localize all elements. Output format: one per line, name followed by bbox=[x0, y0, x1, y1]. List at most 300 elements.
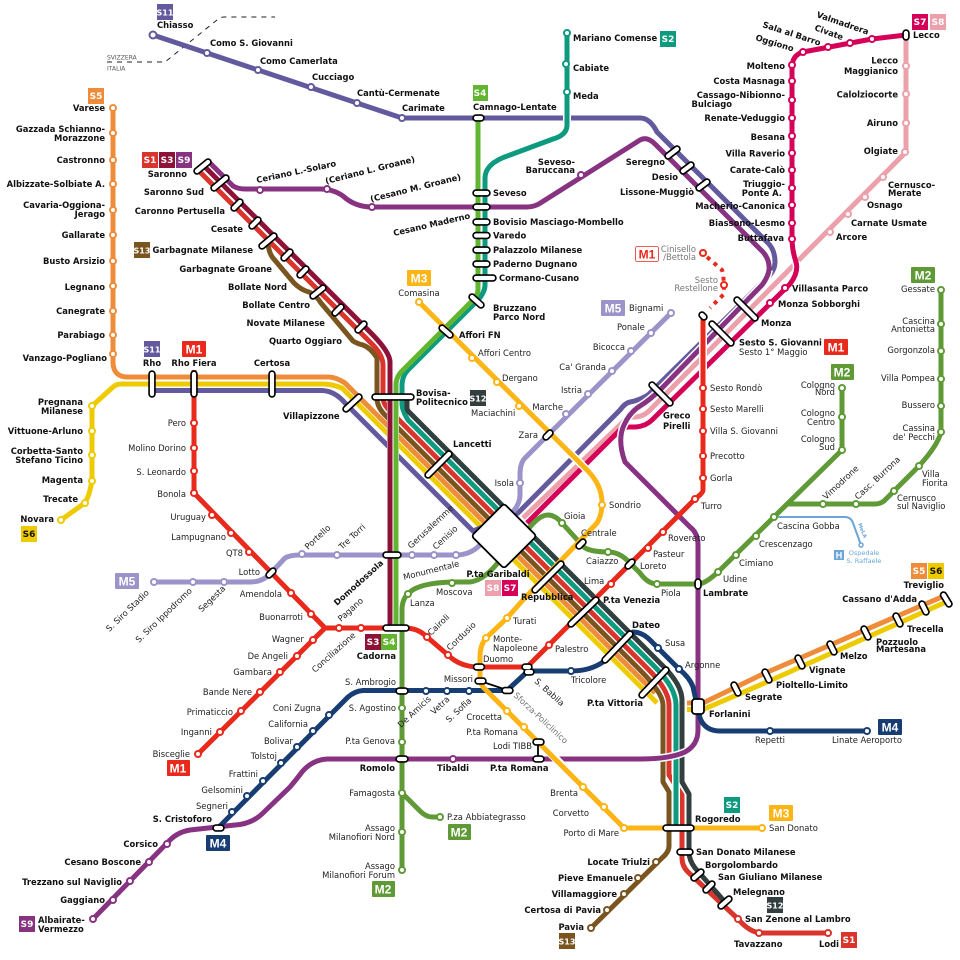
S8 south labels bbox=[663, 180, 936, 431]
badge M1 Rho Fiera bbox=[182, 341, 206, 357]
M4 labels: De Amicis bbox=[396, 694, 433, 729]
S11 labels bbox=[157, 20, 445, 113]
badge S3 Cadorna: S3 bbox=[367, 638, 379, 648]
hospital labels: Ospedale bbox=[849, 549, 879, 557]
S9 west labels: Vermezzo bbox=[38, 924, 84, 934]
badge S6 Novara bbox=[21, 526, 37, 542]
M4 labels: Repetti bbox=[755, 735, 785, 745]
badge S13 Garbagnate: S13 bbox=[134, 246, 150, 256]
passante labels: Tibaldi bbox=[437, 763, 469, 773]
M5 labels: Portello bbox=[303, 523, 332, 551]
passante labels: P.ta Romana bbox=[490, 763, 549, 773]
M5 labels: Marche bbox=[532, 402, 563, 412]
S7 labels: Bulciago bbox=[692, 99, 732, 109]
badge M5 Bignami bbox=[601, 300, 625, 316]
S8 labels: Olgiate bbox=[864, 146, 898, 156]
east branch labels: Melzo bbox=[840, 651, 868, 661]
route S12 dark bbox=[407, 398, 725, 902]
passante labels: P.ta Venezia bbox=[603, 595, 660, 605]
S7 labels: Renate-Veduggio bbox=[704, 113, 785, 123]
M2 southeast labels bbox=[661, 454, 948, 598]
M1 west labels: Bisceglie bbox=[153, 749, 190, 759]
M1 west labels: Pero bbox=[168, 418, 186, 428]
hospital labels bbox=[847, 523, 881, 565]
M1 east labels: Rovereto bbox=[668, 533, 706, 543]
hospital labels: S. Raffaele bbox=[847, 557, 881, 565]
M2 southeast labels: Casc. Burrona bbox=[853, 454, 902, 501]
passante labels: Dateo bbox=[632, 620, 660, 630]
M4 labels: Vetra bbox=[429, 694, 452, 716]
badge S13 Pavia: S13 bbox=[559, 938, 575, 946]
badge M4 Linate: M4 bbox=[882, 720, 899, 734]
west trunk labels: Politecnico bbox=[416, 397, 468, 407]
badge M2 Abbiategrasso bbox=[448, 824, 471, 840]
route S3 S4 casing bbox=[390, 400, 396, 628]
east branch labels: Pioltello-Limito bbox=[776, 680, 848, 690]
S5 labels: Parabiago bbox=[57, 330, 105, 340]
M4 west labels: Tolstoj bbox=[250, 751, 277, 761]
M1 central rotated labels bbox=[310, 596, 513, 674]
badge S5 Varese bbox=[88, 88, 104, 104]
S6 labels: Vittuone-Arluno bbox=[8, 426, 83, 436]
M2 east labels bbox=[801, 284, 935, 452]
Swiss-Italian border: SVIZZERA bbox=[107, 54, 138, 62]
icon hospital H: H bbox=[836, 550, 842, 560]
rotated S9 labels: (Ceriano L. Groane) bbox=[324, 154, 416, 186]
badge M5 San Siro bbox=[115, 573, 139, 589]
badge S9 Albairate bbox=[19, 916, 35, 932]
S7 labels: Ponte A. bbox=[742, 188, 782, 198]
Swiss-Italian border: ITALIA bbox=[107, 66, 126, 72]
M1 east labels: Loreto bbox=[640, 561, 666, 571]
route S9 casing bbox=[621, 270, 769, 759]
S9 east labels bbox=[526, 157, 694, 197]
badge S3 Saronno bbox=[159, 152, 175, 168]
route M4 navy bbox=[218, 632, 867, 828]
M2 east labels: Cascina bbox=[902, 316, 935, 326]
M1 extension labels: /Bettola bbox=[663, 252, 696, 262]
S6 labels: Trecate bbox=[43, 494, 78, 504]
M5 labels: Gerusalemme bbox=[406, 503, 455, 550]
S9 west labels: Trezzano sul Naviglio bbox=[22, 877, 122, 887]
east branch labels: Treviglio bbox=[904, 580, 944, 590]
M2 southeast labels: Piola bbox=[661, 588, 681, 598]
M2 southeast labels: Cernusco bbox=[897, 493, 936, 503]
badge S9 Albairate: S9 bbox=[21, 920, 33, 930]
M1 central rotated labels: Conciliazione bbox=[310, 630, 357, 674]
route S7 magenta bbox=[527, 35, 906, 523]
S11 labels: Cantù-Cermenate bbox=[357, 88, 440, 98]
S7 labels: Costa Masnaga bbox=[713, 76, 785, 86]
badge S12 Melegnano: S12 bbox=[767, 902, 783, 910]
M2 south labels bbox=[322, 677, 396, 880]
S9 west labels: Gaggiano bbox=[60, 895, 105, 905]
badge M4 San Cristoforo bbox=[206, 835, 230, 851]
badge S4 Camnago bbox=[473, 85, 488, 101]
badge S3 Cadorna bbox=[365, 634, 381, 650]
badge M3 Comasina: M3 bbox=[411, 272, 428, 286]
badge S6 Treviglio bbox=[928, 563, 944, 579]
M2 east labels: Cologno bbox=[801, 380, 835, 390]
badge S2 Rogoredo bbox=[724, 797, 740, 813]
M3 labels: Dergano bbox=[502, 373, 538, 383]
S6 labels bbox=[8, 397, 83, 524]
M3 labels: Maciachini bbox=[471, 408, 515, 418]
badge M2 Cologno: M2 bbox=[834, 366, 851, 380]
M1 extension labels: Cinisello bbox=[661, 244, 696, 254]
M4 labels bbox=[396, 638, 902, 745]
badge S7 Lecco bbox=[912, 14, 928, 30]
Sforza-Policlinico grey label: Sforza-Policlinico bbox=[512, 690, 570, 746]
S7 labels: Biassono-Lesmo bbox=[709, 218, 785, 228]
S9 west labels: Albairate- bbox=[38, 915, 85, 925]
east branch labels: Pozzuolo bbox=[876, 637, 918, 647]
M2 south labels: S. Ambrogio bbox=[345, 677, 396, 687]
M2 southeast labels: Cimiano bbox=[739, 558, 773, 568]
S4 labels: Camnago-Lentate bbox=[473, 102, 557, 112]
stations S1 bbox=[735, 916, 831, 936]
S11 labels: Como S. Giovanni bbox=[210, 38, 293, 48]
passante labels: Domodossola bbox=[332, 558, 385, 607]
M2 east labels: Centro bbox=[807, 417, 835, 427]
M1 east labels: Sesto 1° Maggio bbox=[739, 347, 808, 357]
S5 labels: Gazzada Schianno- bbox=[16, 124, 106, 134]
S8 south labels: Sesto S. Giovanni bbox=[739, 338, 822, 348]
M2 southeast labels: Crescenzago bbox=[759, 539, 813, 549]
stations M3 bbox=[416, 299, 765, 831]
M1 east labels: Precotto bbox=[710, 451, 745, 461]
M4 labels: Tricolore bbox=[570, 675, 606, 685]
M3 labels: Brenta bbox=[550, 788, 578, 798]
Swiss-Italian border bbox=[107, 17, 275, 72]
S5 labels bbox=[7, 103, 107, 363]
badge S8 Lecco bbox=[930, 14, 946, 30]
S1 S3 S9 north labels bbox=[135, 169, 342, 346]
route S13 brown bbox=[268, 240, 669, 928]
badge S6 Treviglio: S6 bbox=[930, 567, 942, 577]
M1 east labels: Turro bbox=[700, 501, 722, 511]
M4 west labels: Bolivar bbox=[264, 736, 294, 746]
east branch labels: Segrate bbox=[745, 692, 782, 702]
route S2 north casing bbox=[563, 105, 571, 125]
M2 central labels: Caiazzo bbox=[586, 556, 618, 566]
route S2 teal bbox=[402, 178, 676, 828]
M4 labels: S. Sofia bbox=[444, 696, 473, 724]
S13 labels: Certosa di Pavia bbox=[524, 905, 601, 915]
stations M4 bbox=[229, 645, 870, 815]
S13 labels: Locate Triulzi bbox=[587, 857, 650, 867]
S13 labels: Pieve Emanuele bbox=[558, 873, 633, 883]
M5 labels: Ponale bbox=[617, 322, 645, 332]
badge M1 Cinisello outline bbox=[636, 246, 658, 262]
west trunk labels: Rho bbox=[143, 358, 161, 368]
route S3 over bundle bbox=[388, 395, 392, 628]
badge M2 Gessate bbox=[911, 267, 935, 283]
S5 labels: Gallarate bbox=[62, 230, 105, 240]
S7 labels: Villa Raverio bbox=[725, 148, 785, 158]
station MeLA bbox=[859, 543, 863, 547]
M2 east labels: Nord bbox=[815, 387, 835, 397]
route M5 lilac bbox=[154, 313, 671, 582]
passante labels: Lambrate bbox=[703, 588, 748, 598]
M1 west labels: De Angeli bbox=[248, 651, 288, 661]
badge S2 Mariano bbox=[660, 31, 676, 47]
S7 rotated labels: Sala al Barro bbox=[761, 19, 822, 48]
south labels: Lodi bbox=[819, 939, 839, 949]
badge S5 Treviglio bbox=[911, 563, 927, 579]
S1 S3 S9 north labels: Saronno Sud bbox=[144, 187, 204, 197]
S7 labels: Besana bbox=[751, 132, 785, 142]
S8 south labels: Greco bbox=[663, 410, 691, 420]
M3 labels: Comasina bbox=[398, 288, 440, 298]
M5 labels: Segesta bbox=[196, 583, 227, 614]
rotated S9 labels bbox=[255, 154, 471, 238]
route MeLA bbox=[777, 517, 861, 545]
M3 labels: Sondrio bbox=[609, 500, 641, 510]
S1 S3 S9 north labels: Garbagnate Groane bbox=[179, 264, 272, 274]
east branch labels: Martesana bbox=[876, 644, 926, 654]
badge S11 Rho bbox=[144, 341, 161, 357]
metro station labels bbox=[104, 244, 948, 880]
S13 labels: Villamaggiore bbox=[552, 889, 617, 899]
badge S2 Rogoredo: S2 bbox=[726, 801, 738, 811]
east branch labels: Trecella bbox=[907, 624, 944, 634]
S8 south labels: Cernusco- bbox=[888, 180, 936, 190]
south labels: San Giuliano Milanese bbox=[718, 872, 823, 882]
S7 labels bbox=[692, 61, 786, 243]
M3 labels: Lodi TIBB bbox=[493, 741, 532, 751]
S8 south labels: Pirelli bbox=[663, 421, 691, 431]
S8 south labels: Merate bbox=[888, 188, 922, 198]
badge M2 Abbiategrasso: M2 bbox=[451, 826, 468, 840]
route S8 pink bbox=[523, 35, 906, 518]
M1 west labels: Bonola bbox=[157, 489, 186, 499]
S7 labels: Carate-Calò bbox=[730, 165, 785, 175]
S9 west labels: Cesano Boscone bbox=[64, 857, 141, 867]
badge S11 Chiasso: S11 bbox=[157, 8, 174, 18]
M5 labels: Monumentale bbox=[402, 558, 460, 582]
badge M1 Rho Fiera: M1 bbox=[186, 342, 203, 356]
M4 west labels: Frattini bbox=[229, 769, 258, 779]
M2 southeast labels: Vimodrone bbox=[821, 463, 861, 501]
badge S13 Pavia bbox=[559, 933, 575, 949]
stations S7 bbox=[767, 36, 875, 306]
M1 central rotated labels: Cordusio bbox=[444, 620, 478, 652]
metro badges bbox=[115, 246, 935, 897]
M1 extension labels: Sesto bbox=[695, 275, 718, 285]
S8 south labels: Monza Sobborghi bbox=[778, 299, 860, 309]
S6 labels: Novara bbox=[20, 514, 54, 524]
badge S1 Saronno: S1 bbox=[144, 156, 156, 166]
rotated S9 labels: Cesano Maderno bbox=[392, 210, 471, 238]
S7 labels: Cassago-Nibionno- bbox=[697, 90, 786, 100]
route S4 green bbox=[396, 118, 478, 628]
S5 labels: Busto Arsizio bbox=[43, 256, 105, 266]
M1 extension labels bbox=[661, 244, 718, 293]
M1 east labels: Lima bbox=[584, 576, 604, 586]
M5 labels: S. Siro Ippodromo bbox=[133, 586, 194, 645]
east branch labels: Cassano d'Adda bbox=[842, 594, 917, 604]
M2 east labels: Sud bbox=[819, 442, 835, 452]
badge S1 Lodi: S1 bbox=[843, 936, 855, 946]
S2 north labels: Meda bbox=[573, 91, 599, 101]
S5 labels: Castronno bbox=[57, 155, 105, 165]
S1 S3 S9 north labels: Novate Milanese bbox=[246, 318, 325, 328]
badge S3 Saronno: S3 bbox=[161, 156, 173, 166]
M1 central rotated labels: Cairoli bbox=[425, 612, 451, 637]
east branch labels bbox=[745, 580, 944, 702]
M3 labels: P.ta Romana bbox=[466, 727, 518, 737]
badge S13 Garbagnate bbox=[134, 242, 150, 258]
S1 S3 S9 north labels: Garbagnate Milanese bbox=[152, 245, 253, 255]
badge M5 Bignami: M5 bbox=[605, 302, 622, 316]
S7 labels: Triuggio- bbox=[743, 179, 786, 189]
S11 labels: Cucciago bbox=[312, 72, 355, 82]
S9 west labels: Corsico bbox=[123, 839, 158, 849]
rotated S9 labels: (Cesano M. Groane) bbox=[369, 172, 462, 204]
west trunk labels bbox=[143, 358, 492, 449]
S2 north labels: Cabiate bbox=[573, 63, 609, 73]
M4 west labels bbox=[196, 703, 321, 811]
route S5 S6 east branch bbox=[687, 596, 946, 710]
M5 labels: Istria bbox=[561, 385, 582, 395]
M2 east labels: de' Pecchi bbox=[893, 432, 935, 442]
passante labels: Forlanini bbox=[709, 709, 751, 719]
S1 S3 S9 north labels: Saronno bbox=[148, 169, 187, 179]
M2 south labels: S. Agostino bbox=[349, 703, 396, 713]
M2 southeast labels: Cascina Gobba bbox=[777, 521, 840, 531]
interchange bars bbox=[152, 33, 949, 906]
M2 south labels: Famagosta bbox=[349, 788, 395, 798]
S5 labels: Canegrate bbox=[56, 306, 105, 316]
M2 central labels: Centrale bbox=[581, 528, 617, 538]
M4 west labels: Coni Zugna bbox=[273, 703, 321, 713]
M2 southeast labels: Villa bbox=[922, 469, 940, 479]
M2 central labels bbox=[410, 511, 618, 608]
M1 east labels: Gorla bbox=[710, 473, 733, 483]
route M1 casing bbox=[479, 320, 703, 667]
south labels: San Donato Milanese bbox=[696, 847, 796, 857]
west trunk labels: Lancetti bbox=[453, 439, 492, 449]
badge S1 Lodi bbox=[841, 932, 857, 948]
badge M1 Cinisello outline: M1 bbox=[639, 248, 656, 262]
M1 west labels: Gambara bbox=[233, 667, 272, 677]
passante labels: Cadorna bbox=[357, 651, 396, 661]
M3 labels: Napoleone bbox=[493, 643, 538, 653]
route S6 yellow bbox=[61, 384, 657, 703]
M1 east labels: Pasteur bbox=[653, 549, 685, 559]
M2 south labels: Assago bbox=[365, 823, 395, 833]
S1 S3 S9 north labels: Bollate Nord bbox=[228, 282, 287, 292]
stations M5 bbox=[151, 310, 674, 585]
M3 labels: Monte- bbox=[493, 634, 522, 644]
S4 labels: Palazzolo Milanese bbox=[493, 245, 582, 255]
S8 south labels: Osnago bbox=[867, 200, 903, 210]
M1 west labels: S. Leonardo bbox=[136, 467, 186, 477]
east branch labels: Vignate bbox=[809, 665, 846, 675]
M2 south labels: Milanofiori Nord bbox=[329, 832, 395, 842]
S6 labels: Magenta bbox=[42, 475, 83, 485]
badge S4 Cadorna: S4 bbox=[383, 638, 395, 648]
M5 labels: Tre Torri bbox=[336, 522, 367, 552]
S6 labels: Milanese bbox=[41, 406, 83, 416]
M2 central labels: Gioia bbox=[564, 511, 585, 521]
S6 labels: Corbetta-Santo bbox=[11, 446, 83, 456]
M1 east labels: Palestro bbox=[555, 644, 588, 654]
south labels: San Zenone al Lambro bbox=[745, 914, 851, 924]
M1 west labels: Uruguay bbox=[170, 512, 206, 522]
badge S5 Varese: S5 bbox=[90, 92, 102, 102]
M2 east labels: Cologno bbox=[801, 408, 835, 418]
S4 labels: Cormano-Cusano bbox=[499, 273, 579, 283]
badge M4 Linate bbox=[878, 719, 902, 735]
passante labels: P.ta Garibaldi bbox=[466, 569, 530, 579]
badge S9 Saronno: S9 bbox=[178, 156, 190, 166]
M1 east labels: Sesto Marelli bbox=[710, 404, 764, 414]
passante labels: P.ta Vittoria bbox=[587, 698, 643, 708]
M4 west labels: Gelsomini bbox=[201, 785, 243, 795]
M3 labels bbox=[398, 288, 818, 838]
S8 labels: Airuno bbox=[867, 118, 898, 128]
M1 east labels: Sesto Rondò bbox=[710, 383, 762, 393]
S9 west labels bbox=[22, 814, 212, 934]
M2 central labels: Moscova bbox=[436, 587, 473, 597]
route M3 yellow bbox=[419, 302, 762, 828]
route M2 green bbox=[402, 290, 941, 870]
stations S8 bbox=[827, 63, 909, 235]
badge S12 Melegnano bbox=[767, 897, 783, 913]
S6 labels: Pregnana bbox=[38, 397, 83, 407]
M2 southeast labels: sul Naviglio bbox=[897, 501, 945, 511]
badge M4 San Cristoforo: M4 bbox=[210, 836, 227, 850]
S8 labels: Calolziocorte bbox=[837, 90, 898, 100]
S8 labels bbox=[837, 56, 898, 156]
south labels: Borgolombardo bbox=[705, 860, 778, 870]
M5 labels: Cenisio bbox=[431, 523, 460, 551]
badge S7 Garibaldi bbox=[502, 580, 518, 596]
S8 south labels: Carnate Usmate bbox=[851, 218, 927, 228]
M1 west labels bbox=[128, 418, 305, 759]
badge M3 San Donato: M3 bbox=[773, 806, 790, 820]
S4 labels: Bovisio Masciago-Mombello bbox=[493, 217, 624, 227]
M1 central rotated labels: Pagano bbox=[336, 596, 365, 623]
west trunk labels: Rho Fiera bbox=[171, 358, 217, 368]
S7 labels: Molteno bbox=[747, 61, 785, 71]
M3 labels: Zara bbox=[519, 430, 538, 440]
S8 labels: Maggianico bbox=[844, 66, 898, 76]
M4 west labels: California bbox=[268, 719, 308, 729]
M4 labels: Susa bbox=[665, 638, 685, 648]
badge M1 Bisceglie bbox=[167, 760, 190, 776]
M5 labels: Isola bbox=[495, 478, 514, 488]
badge M1 Sesto: M1 bbox=[828, 340, 845, 354]
P.ta Garibaldi hub diamond bbox=[471, 503, 537, 569]
S5 labels: Albizzate-Solbiate A. bbox=[7, 179, 105, 189]
badge M3 San Donato bbox=[769, 805, 793, 821]
M3 labels: Turati bbox=[512, 616, 536, 626]
M1 west labels: Amendola bbox=[240, 589, 282, 599]
M1 west labels: Wagner bbox=[272, 634, 305, 644]
M2 southeast labels: Udine bbox=[723, 574, 747, 584]
M2 south labels: P.ta Genova bbox=[345, 736, 395, 746]
Abbiategrasso label: P.za Abbiategrasso bbox=[447, 812, 526, 822]
badge S4 Camnago: S4 bbox=[474, 89, 486, 99]
badge S8 Lecco: S8 bbox=[932, 18, 944, 28]
M1 east labels: Villa S. Giovanni bbox=[710, 426, 778, 436]
M4 west labels: Segneri bbox=[196, 801, 228, 811]
S13 labels bbox=[524, 857, 650, 932]
badge M5 San Siro: M5 bbox=[119, 574, 136, 588]
